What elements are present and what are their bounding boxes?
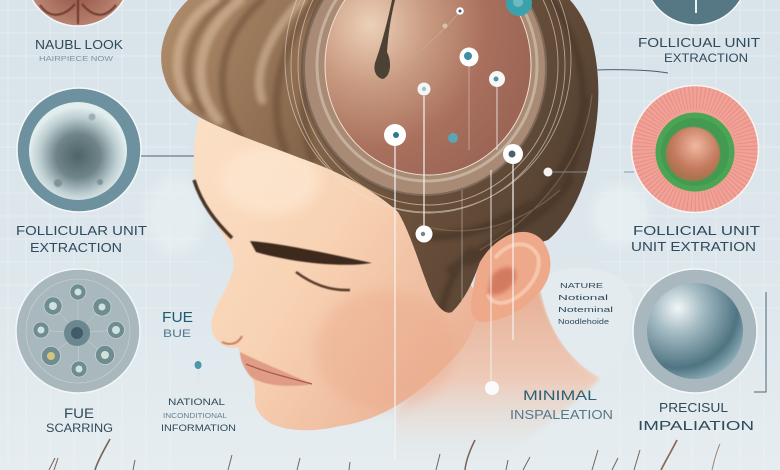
heading: FUE side label <box>162 309 193 340</box>
eyebrow <box>250 241 372 265</box>
heading: FUE scarring: SCARRING <box>46 421 113 435</box>
neck <box>395 290 600 470</box>
heading: precise implantation: PRECISUL <box>659 400 728 415</box>
scalp disc <box>325 0 531 175</box>
heading: minimal implantation: INSPALEATION <box>510 407 613 422</box>
heading: follicular unit extraction right: FOLLICIAL UNIT <box>633 223 760 238</box>
hair <box>161 0 598 313</box>
heading: follicular unit extraction: EXTRACTION <box>30 240 122 255</box>
heading: FUE scarring <box>46 405 113 435</box>
scalp magnifier lens <box>285 0 571 213</box>
text block: small notes <box>558 281 614 326</box>
heading: minimal implantation: MINIMAL <box>523 387 597 403</box>
text block: national information <box>161 397 236 433</box>
far brow edge <box>194 180 232 238</box>
heading: FUE side label: BUE <box>163 328 191 340</box>
ear <box>471 232 550 322</box>
connector: right hair to top label <box>595 70 668 73</box>
heading: natural look: NAUBL LOOK <box>35 37 123 52</box>
panel: FUE follicle network circle <box>16 269 140 393</box>
teal badge top <box>506 0 532 16</box>
heading: FUE scarring: FUE <box>64 405 94 421</box>
heading: follicular unit extraction right <box>631 223 760 254</box>
glass ring <box>303 0 547 196</box>
heading: follicular unit extraction right: UNIT EXTRATION <box>631 239 756 254</box>
bracket line <box>754 292 766 392</box>
pin: center <box>418 82 430 96</box>
heading: precise implantation: IMPALIATION <box>638 418 754 433</box>
text block: small notes: Noteminal <box>558 305 614 314</box>
pin: small top <box>456 7 464 15</box>
text block: small notes: NATURE <box>560 281 603 290</box>
heading: follicular unit extraction top right: EXTRACTION <box>664 51 748 65</box>
panel: silver sphere circle <box>633 269 757 393</box>
panel: top-left scalp cross-section circle <box>25 0 131 26</box>
pin: right <box>489 71 505 87</box>
hair strands along the bottom <box>49 439 720 470</box>
hair follicle <box>374 0 395 79</box>
text block: national information: NATIONAL <box>168 397 225 407</box>
pin: small right <box>544 168 552 176</box>
pin: lower <box>416 226 432 242</box>
panel: pink follicle circle <box>632 86 758 212</box>
pin: bottom <box>485 381 499 395</box>
text block: small notes: Notional <box>558 293 609 302</box>
heading: follicular unit extraction <box>16 223 147 255</box>
heading: minimal implantation <box>510 387 613 422</box>
text block: national information: INCONDITIONAL <box>163 413 227 420</box>
lips <box>240 352 312 386</box>
pin: lens edge <box>503 144 523 164</box>
icon: teal pin <box>195 361 202 388</box>
heading: natural look: HAIRPIECE NOW <box>39 54 114 63</box>
pin: large left <box>384 124 406 146</box>
heading: FUE side label: FUE <box>162 309 193 326</box>
connector line with dot <box>141 154 244 158</box>
nostril <box>222 336 242 344</box>
face <box>194 118 480 430</box>
pin: upper right <box>460 48 478 66</box>
callout pins and lines <box>384 0 590 460</box>
heading: natural look <box>35 37 123 63</box>
teal marker on scalp <box>448 133 458 143</box>
heading: follicular unit extraction: FOLLICULAR UNIT <box>16 223 147 238</box>
light panel behind neck text <box>540 268 632 378</box>
heading: follicular unit extraction top right <box>638 35 760 65</box>
connector: right hair to pink circle <box>552 171 634 173</box>
text block: small notes: Noodlehoide <box>558 317 609 326</box>
panel: top-right circle <box>644 0 748 25</box>
heading: precise implantation <box>638 400 754 433</box>
text block: national information: INFORMATION <box>161 423 236 433</box>
heading: follicular unit extraction top right: FOLLICUAL UNIT <box>638 35 760 50</box>
outer rings <box>285 0 571 213</box>
closed eye <box>296 272 350 290</box>
panel: follicular unit sphere circle <box>17 88 141 212</box>
